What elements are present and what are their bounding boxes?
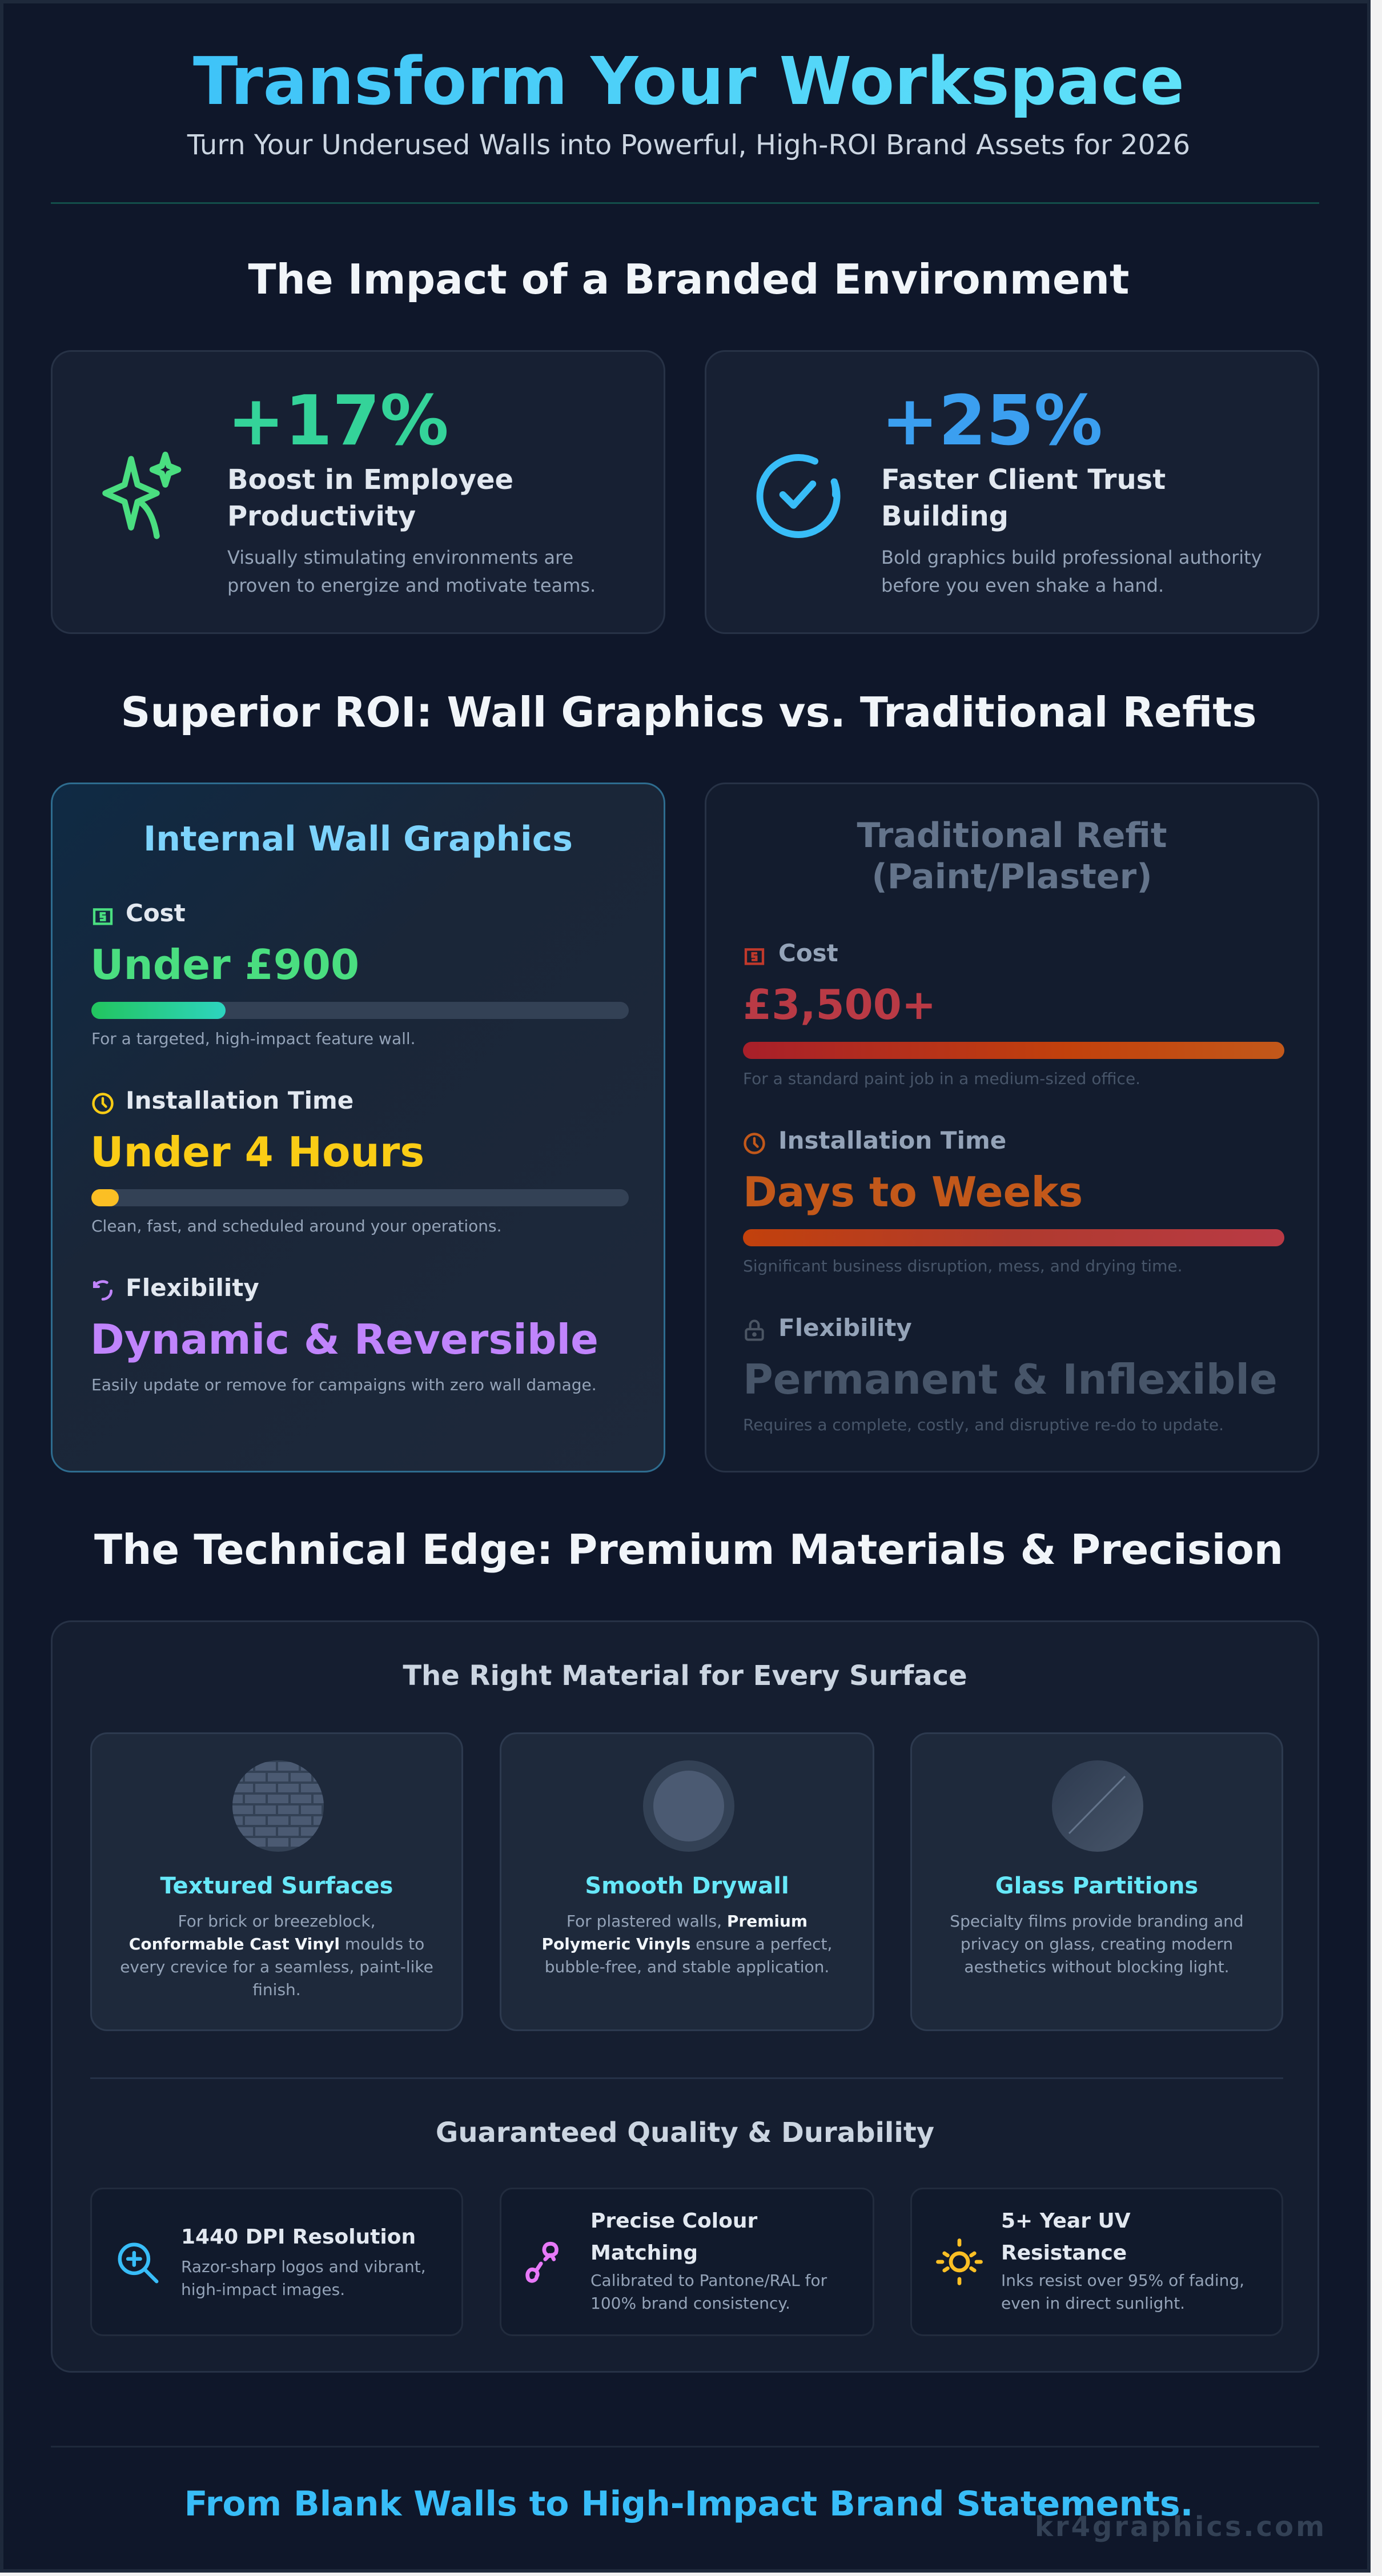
- icon: clock: [92, 1093, 114, 1114]
- card title: Smooth Drywall: [585, 1873, 789, 1899]
- row: flexibility: [90, 1274, 598, 1394]
- row: time: Installation Time: [126, 1086, 353, 1114]
- icon: check circle: [756, 454, 841, 538]
- icon: money: [93, 908, 113, 925]
- stat description: [881, 547, 1262, 596]
- stat description: [227, 547, 596, 596]
- subtitle: Turn Your Underused Walls into Powerful, High-ROI Brand Assets for 2026: [187, 129, 1190, 161]
- row: flexibility: [706, 1310, 1317, 1447]
- icon: smooth circle: [643, 1760, 734, 1852]
- icon: lock: [742, 1317, 767, 1343]
- bar: time: [91, 1189, 629, 1206]
- row: flexibility: Flexibility: [126, 1274, 259, 1302]
- heading: technical edge: The Technical Edge: Premium Materials & Precision: [94, 1526, 1283, 1574]
- stat description: Visually stimulating environments are: [227, 547, 573, 568]
- card title: Precise Colour: [590, 2209, 757, 2233]
- icon: zoom: [114, 2238, 163, 2288]
- card text: bubble-free, and stable application.: [545, 1957, 829, 1976]
- stat value: +17%: [227, 382, 449, 461]
- row: time: Clean, fast, and scheduled around your operations.: [91, 1217, 502, 1235]
- stat label: [881, 464, 1166, 532]
- heading: ROI: Superior ROI: Wall Graphics vs. Traditional Refits: [121, 688, 1256, 736]
- card text: [181, 2256, 426, 2301]
- card title: Textured Surfaces: [160, 1873, 393, 1899]
- watermark: kr4graphics.com: [1035, 2511, 1327, 2543]
- icon: refresh: [93, 1280, 113, 1301]
- panel: stat productivity: [51, 350, 665, 634]
- row: time: [743, 1126, 1284, 1275]
- card title: 5+ Year UV: [1001, 2209, 1131, 2233]
- icon: paint: [517, 2236, 569, 2291]
- row: cost: For a standard paint job in a medium-sized office.: [743, 1069, 1140, 1088]
- card text: even in direct sunlight.: [1001, 2294, 1185, 2313]
- panel title: [857, 816, 1167, 897]
- card: drywall: [500, 1732, 874, 2031]
- panel: traditional refit: [705, 783, 1319, 1472]
- title: Transform Your Workspace: [193, 43, 1184, 120]
- row: time: Installation Time: [778, 1126, 1006, 1154]
- card text: For brick or breezeblock,: [178, 1912, 376, 1931]
- card: DPI: [90, 2188, 463, 2336]
- panel title: Internal Wall Graphics: [143, 819, 573, 859]
- subheading: quality: Guaranteed Quality & Durability: [436, 2117, 934, 2149]
- card text: Inks resist over 95% of fading,: [1001, 2271, 1244, 2290]
- row: cost: Cost: [126, 899, 186, 927]
- card text: 100% brand consistency.: [590, 2294, 790, 2313]
- card text: aesthetics without blocking light.: [964, 1957, 1230, 1976]
- card title: [1001, 2205, 1131, 2269]
- bar: cost: [91, 1002, 629, 1019]
- stat label: [227, 464, 513, 532]
- card text: [1001, 2269, 1244, 2315]
- row: time: [90, 1086, 629, 1235]
- card text: [912, 1910, 1281, 1979]
- subheading: materials: The Right Material for Every Surface: [403, 1660, 967, 1692]
- stat description: Bold graphics build professional authority: [881, 547, 1262, 568]
- row: time: Significant business disruption, mess, and drying time.: [743, 1257, 1182, 1275]
- icon: money: [745, 948, 764, 965]
- bar: time: [743, 1229, 1284, 1246]
- panel: stat trust: [705, 350, 1319, 634]
- stat value: +25%: [881, 382, 1103, 461]
- stat label: Faster Client Trust: [881, 464, 1166, 496]
- row: cost: [90, 899, 629, 1048]
- bar: cost: [743, 1042, 1284, 1059]
- panel title: Traditional Refit: [857, 816, 1167, 856]
- value: Under 4 Hours: [90, 1128, 424, 1176]
- row: cost: [743, 939, 1284, 1088]
- stat label: Boost in Employee: [227, 464, 513, 496]
- card text: Calibrated to Pantone/RAL for: [590, 2271, 827, 2290]
- card: colour: [500, 2188, 874, 2336]
- icon: glass circle: [1052, 1760, 1143, 1852]
- panel: wall graphics: [51, 783, 665, 1472]
- card text: high-impact images.: [181, 2280, 345, 2299]
- card: glass: [910, 1732, 1283, 2031]
- card text: [92, 1910, 461, 2001]
- card: textured: [90, 1732, 463, 2031]
- card text: Polymeric Vinyls ensure a perfect,: [542, 1935, 832, 1953]
- stat description: proven to energize and motivate teams.: [227, 575, 596, 596]
- stat label: Building: [881, 500, 1009, 532]
- card text: For plastered walls, Premium: [567, 1912, 807, 1931]
- icon: clock: [744, 1133, 765, 1154]
- card text: finish.: [252, 1980, 301, 1999]
- row: cost: Cost: [778, 939, 838, 967]
- card title: Glass Partitions: [995, 1873, 1198, 1899]
- icon: sun: [934, 2236, 985, 2288]
- card title: [590, 2205, 757, 2269]
- card title: 1440 DPI Resolution: [181, 2225, 416, 2249]
- card text: every crevice for a seamless, paint-like: [120, 1957, 433, 1976]
- icon: brick circle: [232, 1760, 324, 1852]
- stat description: before you even shake a hand.: [881, 575, 1164, 596]
- value: Under £900: [90, 941, 359, 989]
- footer tagline: From Blank Walls to High-Impact Brand Statements.: [184, 2484, 1193, 2524]
- stat label: Productivity: [227, 500, 416, 532]
- row: flexibility: Flexibility: [778, 1314, 912, 1342]
- icon: sparkles: [102, 451, 182, 539]
- card text: [501, 1910, 873, 1979]
- card title: Matching: [590, 2241, 698, 2265]
- row: flexibility: Easily update or remove for campaigns with zero wall damage.: [91, 1375, 597, 1394]
- card text: Specialty films provide branding and: [950, 1912, 1244, 1931]
- row: cost: For a targeted, high-impact feature wall.: [91, 1029, 416, 1048]
- panel title: (Paint/Plaster): [871, 857, 1152, 897]
- card text: [590, 2269, 827, 2315]
- card text: Razor-sharp logos and vibrant,: [181, 2257, 426, 2276]
- value: £3,500+: [743, 981, 936, 1029]
- card title: Resistance: [1001, 2241, 1127, 2265]
- value: Permanent & Inflexible: [743, 1355, 1277, 1403]
- card text: Conformable Cast Vinyl moulds to: [129, 1935, 424, 1953]
- panel: materials and quality: [51, 1620, 1319, 2373]
- card text: privacy on glass, creating modern: [961, 1935, 1233, 1953]
- card: UV: [910, 2188, 1283, 2336]
- row: flexibility: Requires a complete, costly, and disruptive re-do to update.: [743, 1415, 1224, 1434]
- value: Days to Weeks: [743, 1168, 1083, 1216]
- heading: impact: The Impact of a Branded Environment: [248, 255, 1129, 303]
- value: Dynamic & Reversible: [90, 1315, 598, 1363]
